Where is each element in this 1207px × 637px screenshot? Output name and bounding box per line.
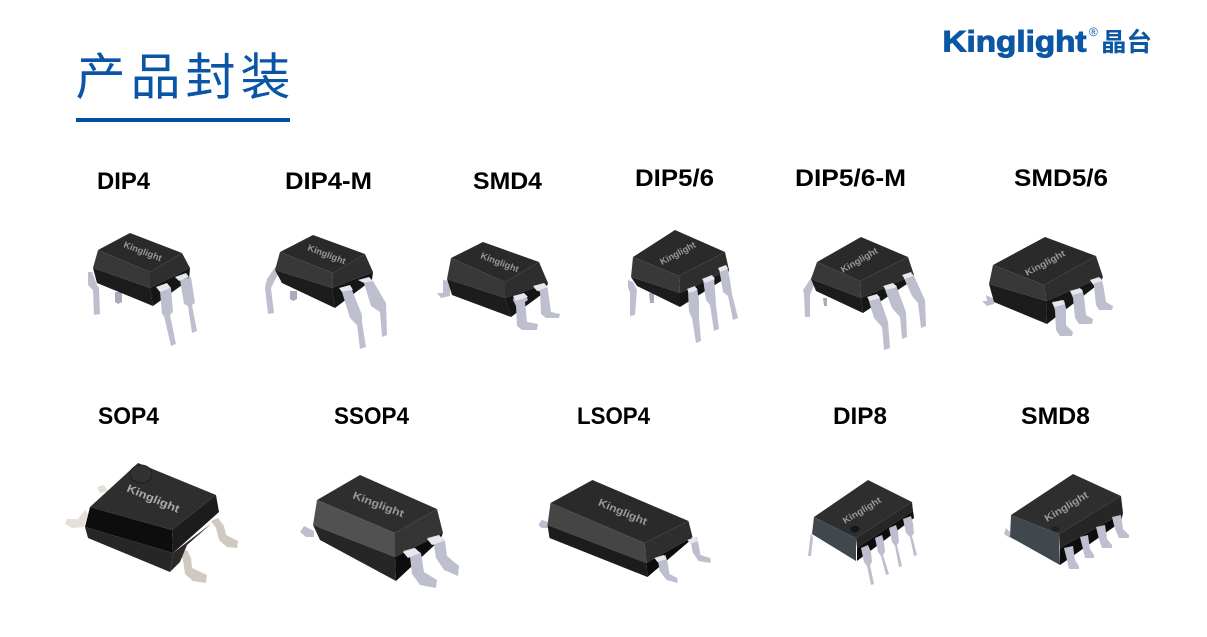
label: DIP8: DIP8 bbox=[833, 403, 887, 430]
label: DIP5/6: DIP5/6 bbox=[635, 165, 714, 192]
icon: SSOP4 chip: Kinglight bbox=[351, 490, 406, 520]
panel: SSOP4 package bbox=[300, 403, 459, 588]
label: SMD4: SMD4 bbox=[473, 168, 542, 195]
icon: DIP5/6 chip: Kinglight bbox=[658, 240, 697, 267]
label: SSOP4: SSOP4 bbox=[334, 403, 409, 430]
panel: SMD4 package bbox=[437, 168, 560, 330]
icon: SOP4 chip bbox=[65, 463, 238, 583]
panel: SMD8 package bbox=[1004, 403, 1129, 569]
icon: SMD4 chip: Kinglight bbox=[479, 251, 520, 274]
logo: Kinglight: Kinglight bbox=[942, 26, 1087, 58]
icon: SMD8 chip bbox=[1004, 474, 1129, 569]
label: SMD8: SMD8 bbox=[1021, 403, 1090, 430]
panel: DIP8 package bbox=[808, 403, 917, 585]
icon: DIP5/6-M chip: Kinglight bbox=[839, 246, 880, 275]
icon: DIP4-M chip bbox=[265, 235, 387, 349]
panel: LSOP4 package bbox=[538, 403, 710, 583]
icon: DIP4-M chip: Kinglight bbox=[306, 243, 347, 266]
icon: SOP4 chip: Kinglight bbox=[125, 483, 181, 516]
icon: SMD8 chip: Kinglight bbox=[1043, 490, 1091, 525]
icon: DIP8 chip bbox=[808, 480, 917, 585]
label: SOP4: SOP4 bbox=[98, 403, 159, 430]
label: DIP5/6-M: DIP5/6-M bbox=[795, 165, 906, 192]
logo: Kinglight bbox=[942, 25, 1152, 58]
label: LSOP4: LSOP4 bbox=[577, 403, 650, 430]
panel: DIP4 package bbox=[88, 168, 197, 346]
panel: SMD5/6 package bbox=[982, 165, 1113, 336]
label: SMD5/6: SMD5/6 bbox=[1014, 165, 1108, 192]
icon: SSOP4 chip bbox=[300, 475, 459, 588]
logo: Kinglight: 晶台 bbox=[1101, 28, 1152, 57]
logo: Kinglight: ® bbox=[1089, 25, 1098, 39]
icon: SMD5/6 chip bbox=[982, 237, 1113, 336]
icon: DIP4 chip bbox=[88, 233, 197, 346]
title: 产品封装 bbox=[76, 50, 296, 106]
panel: DIP5/6 package bbox=[628, 165, 738, 343]
panel: DIP5/6-M package bbox=[795, 165, 926, 350]
icon: LSOP4 chip: Kinglight bbox=[596, 497, 649, 528]
icon: DIP5/6-M chip bbox=[803, 237, 926, 350]
icon: SMD4 chip bbox=[437, 242, 560, 330]
panel: DIP4-M package bbox=[265, 168, 387, 349]
icon: DIP4 chip: Kinglight bbox=[122, 240, 163, 263]
label: DIP4: DIP4 bbox=[97, 168, 150, 195]
icon: LSOP4 chip bbox=[538, 480, 710, 583]
icon: DIP5/6 chip bbox=[628, 230, 738, 343]
icon: DIP8 chip: Kinglight bbox=[841, 495, 883, 526]
title underline bbox=[76, 118, 290, 122]
icon: SMD5/6 chip: Kinglight bbox=[1023, 248, 1067, 278]
panel: SOP4 package bbox=[65, 403, 238, 583]
label: DIP4-M: DIP4-M bbox=[285, 168, 372, 195]
